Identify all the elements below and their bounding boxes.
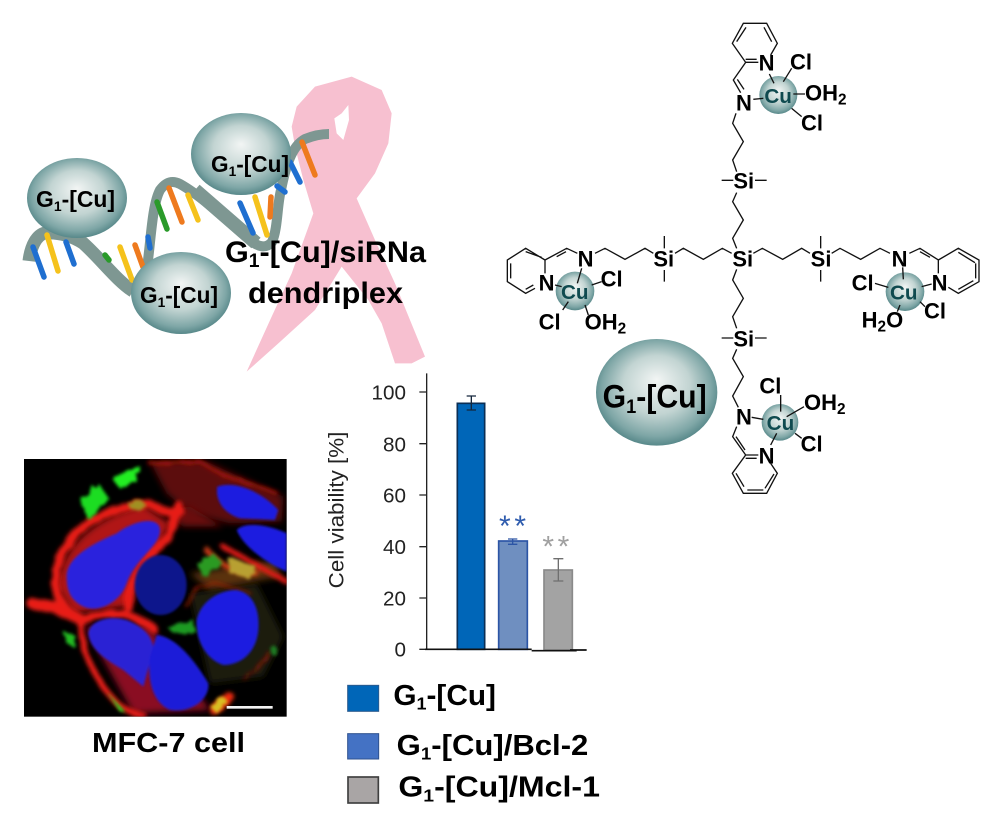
micrograph: MFC-7 cell fluorescence image xyxy=(24,459,287,717)
copper centre: left: 2 xyxy=(618,320,626,337)
sphere: left G1-[Cu] xyxy=(27,158,127,238)
copper centre: top: N xyxy=(736,91,752,116)
copper centre: left: N xyxy=(539,271,555,296)
icon: pink awareness ribbon xyxy=(247,77,425,372)
copper centre: left: OH xyxy=(585,309,618,334)
bar: G1-[Cu]/Bcl-2: ** xyxy=(499,510,530,543)
copper centre: right: O xyxy=(886,307,903,332)
legend: G xyxy=(393,680,416,712)
copper centre: left: Cl xyxy=(601,267,623,292)
copper centre: bottom: OH xyxy=(804,390,837,415)
silicon atoms: Si xyxy=(733,326,754,351)
bar: G1-[Cu]/Mcl-1 xyxy=(542,531,573,650)
legend: -[Cu]/Bcl-2 xyxy=(431,730,588,762)
copper centre: left: Cl xyxy=(539,309,561,334)
copper centre: top: Cl xyxy=(801,110,823,135)
sphere: left G1-[Cu]: -[Cu] xyxy=(62,186,115,212)
copper centre: top: N xyxy=(759,51,775,76)
sphere: top G1-[Cu]: G xyxy=(211,151,229,177)
sphere: bottom G1-[Cu]: -[Cu] xyxy=(165,282,218,308)
y axis xyxy=(372,373,427,662)
sphere: left G1-[Cu]: 1 xyxy=(54,198,62,214)
red membrane outlines xyxy=(33,462,287,715)
scale bar xyxy=(227,706,273,709)
copper centre: bottom: Cl xyxy=(759,373,781,398)
heading: dendriplex label: -[Cu]/siRNa xyxy=(260,236,426,269)
copper centre: bottom xyxy=(736,373,846,468)
heading: dendriplex label xyxy=(225,236,426,310)
silicon atoms: Si xyxy=(811,247,831,272)
silicon atoms: Si xyxy=(733,169,754,194)
copper centre: right: N xyxy=(932,271,948,296)
caption: MFC-7 cell: MFC-7 cell xyxy=(92,727,245,758)
y axis: 60 xyxy=(383,485,406,508)
copper centre: right xyxy=(852,247,948,335)
sphere: bottom G1-[Cu]: 1 xyxy=(158,294,165,310)
bonds skeleton xyxy=(507,23,979,493)
legend: 1 xyxy=(421,744,432,764)
bar: G1-[Cu]/Bcl-2 xyxy=(499,510,530,649)
copper centre: bottom: Cu xyxy=(767,412,794,435)
copper centre: right: N xyxy=(892,247,908,272)
sphere: large G1-[Cu] key: G xyxy=(603,379,628,415)
copper centre: top: Cu xyxy=(764,85,792,108)
copper centre: left: Cu xyxy=(561,281,589,304)
legend: 1 xyxy=(423,785,435,805)
green and yellow signal xyxy=(63,465,277,713)
copper centre: bottom: N xyxy=(759,443,775,468)
copper centre: right: Cl xyxy=(852,271,874,296)
cytoplasm red haze xyxy=(57,462,283,713)
sphere: large G1-[Cu] key: -[Cu] xyxy=(636,379,707,415)
copper centre: bottom: Cl xyxy=(801,432,823,457)
y axis: 80 xyxy=(383,433,406,456)
silicon atoms: Si xyxy=(653,247,674,272)
legend: -[Cu]/Mcl-1 xyxy=(434,772,600,804)
copper centre: top xyxy=(736,49,847,135)
blue nuclei xyxy=(67,485,287,711)
copper centre: bottom: 2 xyxy=(837,401,846,418)
copper centre: top: Cl xyxy=(790,49,812,74)
copper centre: right: Cu xyxy=(890,281,918,304)
heading: dendriplex label: 1 xyxy=(249,251,260,272)
copper centre: bottom: N xyxy=(736,405,752,430)
y axis: 0 xyxy=(394,639,406,662)
copper centre: left xyxy=(539,247,626,337)
legend: -[Cu] xyxy=(427,680,496,712)
copper centre: top: OH xyxy=(805,81,838,106)
sphere: top G1-[Cu] xyxy=(191,113,291,195)
sphere: large G1-[Cu] key: 1 xyxy=(626,397,637,418)
bar: G1-[Cu] xyxy=(457,396,485,649)
copper centre: left: N xyxy=(578,247,594,272)
heading: dendriplex label: G xyxy=(225,236,248,269)
legend: G xyxy=(398,772,421,804)
sphere: left G1-[Cu]: G xyxy=(36,186,54,212)
y axis: 40 xyxy=(383,536,406,559)
legend: 1 xyxy=(417,694,427,714)
copper centre: right: Cl xyxy=(924,299,946,324)
heading: dendriplex label: dendriplex xyxy=(248,277,403,310)
copper centre: right: H xyxy=(862,307,878,332)
sphere: bottom G1-[Cu]: G xyxy=(140,282,158,308)
legend: G xyxy=(397,730,419,762)
bar: G1-[Cu]/Mcl-1: ** xyxy=(542,531,573,564)
sphere: large G1-[Cu] key xyxy=(596,339,717,446)
panel: siRNA dendriplex illustration xyxy=(27,77,426,372)
siRNA helix strand xyxy=(29,134,329,291)
silicon atoms xyxy=(653,169,831,351)
copper centre: right: 2 xyxy=(878,318,886,335)
sphere: top G1-[Cu]: -[Cu] xyxy=(236,151,289,177)
copper centre: top: 2 xyxy=(838,92,847,109)
legend xyxy=(348,680,600,805)
y axis title: Cell viability [%] xyxy=(324,432,348,588)
y axis: 100 xyxy=(372,382,406,405)
sphere: bottom G1-[Cu] xyxy=(131,252,231,334)
silicon atoms: Si xyxy=(732,247,753,272)
y axis: 20 xyxy=(383,587,406,610)
chemical structure: G1-[Cu] dendrimer xyxy=(507,23,979,493)
sphere: top G1-[Cu]: 1 xyxy=(229,163,236,179)
bar chart: cell viability xyxy=(324,373,600,805)
x axis xyxy=(425,649,587,651)
